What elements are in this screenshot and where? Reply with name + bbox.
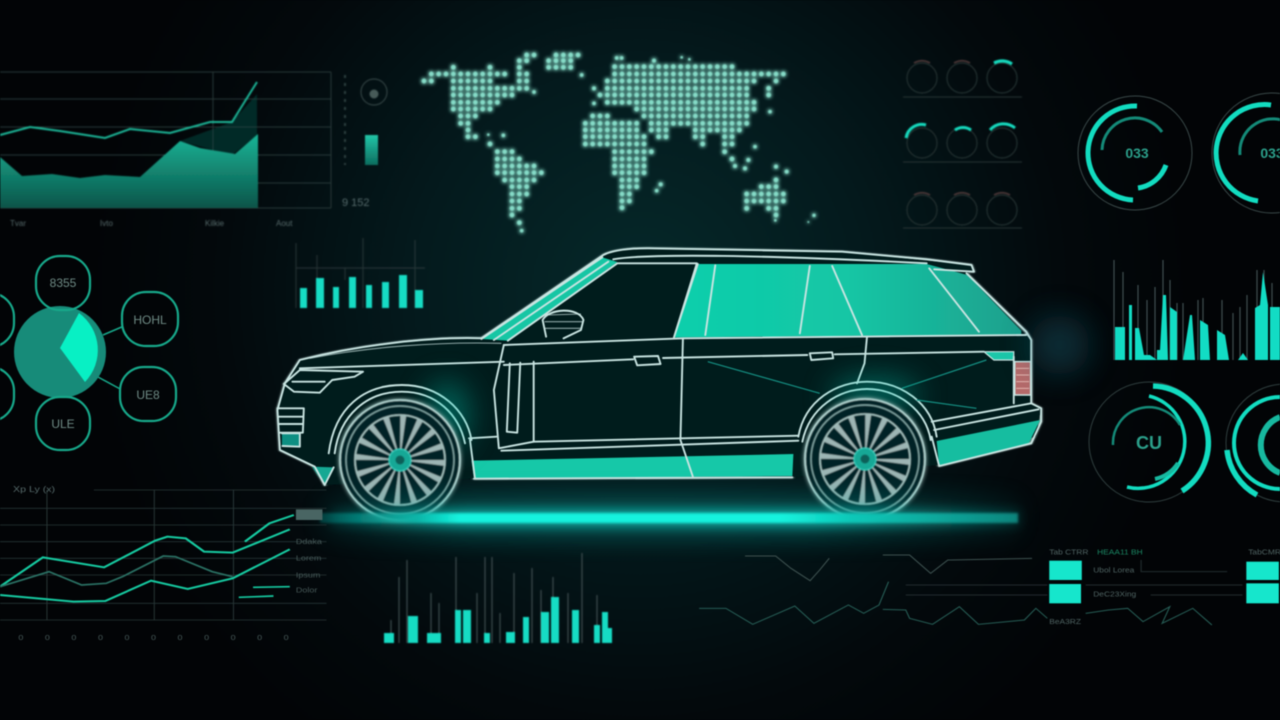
north america xyxy=(424,55,585,144)
upper line series xyxy=(0,82,257,138)
body shell dark fill xyxy=(277,248,1041,485)
dark area under upper line xyxy=(180,94,257,155)
reflections xyxy=(708,360,986,408)
gauge circles xyxy=(907,63,1017,225)
vent xyxy=(507,362,534,442)
x axis labels xyxy=(18,634,289,642)
teal bars xyxy=(1115,272,1280,360)
labels xyxy=(1049,548,1280,626)
panel: small gauge matrix xyxy=(903,61,1022,228)
radial gauge 1: 033 xyxy=(1125,145,1149,161)
connector lines xyxy=(906,560,1242,595)
south america xyxy=(497,152,549,223)
x axis labels: 0 xyxy=(18,634,24,642)
series labels: Lorem xyxy=(296,554,322,562)
radial gauge 3: CU xyxy=(1136,433,1162,453)
x axis labels: 0 xyxy=(204,634,210,642)
series bright upper xyxy=(0,529,290,587)
series labels: Dolor xyxy=(296,586,318,594)
rear bumper teal xyxy=(937,420,1040,466)
series bright lower xyxy=(0,549,290,602)
axis labels: Aout xyxy=(276,219,293,228)
teal squares xyxy=(1049,561,1279,603)
x axis labels: 0 xyxy=(231,634,236,642)
axis labels xyxy=(10,219,293,228)
panel: multi line chart bottom left xyxy=(0,485,327,642)
tail light xyxy=(1015,362,1031,395)
labels: DeC23Xing xyxy=(1093,590,1136,599)
labels: BeA3RZ xyxy=(1049,617,1081,626)
radial gauge 1 xyxy=(1078,96,1192,210)
series labels xyxy=(296,538,322,594)
red gauge arcs xyxy=(914,61,1010,195)
panel: pie with nodes xyxy=(0,256,178,450)
value box xyxy=(296,509,322,520)
radial gauge 2 xyxy=(1212,93,1280,213)
lower traces xyxy=(699,582,1212,625)
africa xyxy=(585,116,659,208)
front bumper teal xyxy=(312,467,334,485)
grid xyxy=(0,72,331,208)
side glass teal xyxy=(674,264,1021,337)
x axis labels: 0 xyxy=(257,634,263,642)
pie base xyxy=(14,306,106,398)
axis labels: Kilkie xyxy=(205,219,225,228)
ground glow beam xyxy=(320,498,1020,536)
thin lines xyxy=(391,553,597,643)
node top xyxy=(36,256,90,310)
radial gauge 4 xyxy=(1226,384,1280,502)
labels: Ubol Lorea xyxy=(1093,566,1135,575)
fog lamp teal xyxy=(282,433,300,446)
rear lamp strip xyxy=(984,352,1014,360)
car xyxy=(277,248,1090,520)
node lower right xyxy=(120,367,176,421)
bar chart: bottom center histogram xyxy=(384,553,612,643)
rear bumper lines xyxy=(932,357,1039,430)
sill teal xyxy=(471,454,793,479)
thin lines xyxy=(1114,260,1272,360)
teal bars xyxy=(384,597,612,643)
x axis labels: 0 xyxy=(98,634,103,642)
window frames xyxy=(481,257,979,341)
body xyxy=(277,248,1041,485)
chart heading: Xp Ly (x) xyxy=(13,485,55,495)
teal gauge arcs xyxy=(906,61,1015,138)
pie slice xyxy=(60,313,98,382)
door seams xyxy=(469,337,867,477)
mirror lines xyxy=(545,314,582,328)
panel: area line chart top left xyxy=(0,72,331,228)
series dim xyxy=(0,556,233,587)
grid xyxy=(0,490,327,620)
axis labels: Ivto xyxy=(100,219,113,228)
islands xyxy=(487,56,816,232)
bars xyxy=(300,275,423,308)
hood crease xyxy=(310,343,501,358)
windshield teal xyxy=(481,257,617,341)
node lower right: UE8 xyxy=(136,388,160,402)
rear wheel xyxy=(805,399,925,519)
handles xyxy=(634,352,833,365)
node lower left xyxy=(0,367,14,421)
baselines xyxy=(903,97,1022,228)
x axis labels: 0 xyxy=(284,634,289,642)
upper traces xyxy=(745,555,1032,581)
filled area series xyxy=(0,134,258,208)
node upper right: HOHL xyxy=(133,313,167,327)
series labels: Ipsum xyxy=(296,571,321,579)
x axis labels: 0 xyxy=(124,634,130,642)
series extension xyxy=(245,515,294,542)
eurasia xyxy=(600,67,791,159)
dial xyxy=(361,79,387,105)
roof second line xyxy=(613,256,927,263)
connectors xyxy=(98,326,124,390)
node bottom xyxy=(36,397,90,450)
node upper left xyxy=(0,293,14,347)
node upper right xyxy=(122,292,178,346)
node bottom: ULE xyxy=(51,417,75,431)
value text: 9 152 xyxy=(342,197,370,209)
x axis labels: 0 xyxy=(71,634,77,642)
panel: small gauge column xyxy=(342,75,387,209)
scale xyxy=(344,75,346,165)
ambient glow near wheels xyxy=(425,315,1090,449)
outline xyxy=(277,248,1041,485)
front wheel xyxy=(340,400,460,520)
x axis labels: 0 xyxy=(151,634,156,642)
radial gauge 3 xyxy=(1089,382,1209,502)
fog lamp outline xyxy=(282,433,300,447)
belt and shoulder lines xyxy=(300,335,1026,368)
reference lines xyxy=(296,238,425,308)
x axis labels: 0 xyxy=(45,634,50,642)
panel: bottom right line charts xyxy=(699,548,1280,626)
x axis labels: 0 xyxy=(178,634,183,642)
battery bar xyxy=(365,135,378,165)
grille xyxy=(277,408,304,433)
headlamp xyxy=(284,370,363,393)
labels: TabCMR xyxy=(1248,548,1280,557)
histogram right xyxy=(1114,260,1280,360)
small segments xyxy=(239,587,290,597)
australia xyxy=(747,180,791,215)
series labels: Ddaka xyxy=(296,538,322,546)
axis labels: Tvar xyxy=(10,219,26,228)
green label: HEAA11 BH xyxy=(1097,548,1143,557)
node top: 8355 xyxy=(50,276,77,290)
labels: Tab CTRR xyxy=(1049,548,1089,557)
bar chart: small teal xyxy=(296,238,425,308)
world map xyxy=(424,55,816,232)
